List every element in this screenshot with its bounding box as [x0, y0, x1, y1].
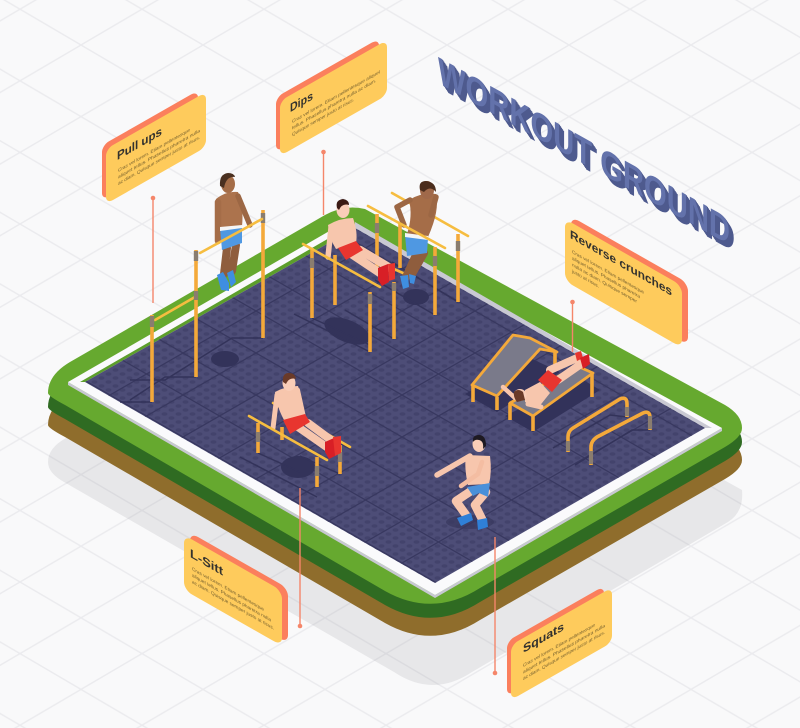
L-sit bars	[258, 403, 350, 474]
low parallel bars	[568, 398, 650, 465]
figure: L-sit	[273, 373, 341, 459]
dark grass layer	[48, 221, 742, 618]
dip bars, red shorts	[312, 243, 403, 339]
body text: pull ups: ac diam. Quisque semper justo at risus.	[118, 135, 200, 187]
front dip bar	[303, 244, 394, 352]
title	[438, 49, 735, 260]
body text: dips: tellus. Phasellus pharetra nulla ac diam.	[292, 78, 376, 132]
heading: reverse crunches: Reverse crunches	[570, 227, 672, 299]
platform shadow	[48, 300, 742, 685]
body text: reverse crunches: Cras vel lorem. Etiam pellentesque	[572, 249, 644, 296]
pull up bars	[152, 210, 263, 402]
dip bars, blue shorts	[377, 193, 468, 315]
callout: dips	[276, 34, 387, 158]
body text: reverse crunches: aliquet tellus. Phasellus pharetra	[572, 256, 640, 300]
body text: squats: aliquet tellus. Phasellus pharetra nulla	[523, 623, 605, 676]
grass top	[48, 207, 742, 604]
callout: L-sitt	[184, 529, 288, 649]
front L-sit bar	[249, 416, 327, 487]
body text: squats: ac diam. Quisque semper justo at risus.	[523, 630, 605, 682]
body text: reverse crunches: justo at risus.	[571, 268, 599, 290]
pointer: reverse crunches	[570, 300, 575, 352]
body text: pull ups: aliquet tellus. Phasellus pharetra nulla	[118, 128, 200, 181]
body text: L-sitt: ac diam. Quisque semper justo at risus.	[192, 579, 274, 632]
body text: squats: Cras vel lorem. Etiam pellentesque	[523, 622, 595, 669]
figure: pull ups	[200, 173, 262, 291]
heading: L-sitt: L-Sitt	[190, 546, 224, 579]
pointer: L-sitt	[298, 488, 302, 628]
callout: pull ups	[102, 86, 206, 206]
platform base	[48, 207, 742, 636]
figure: squats	[437, 435, 491, 530]
callout: squats	[507, 581, 612, 702]
figure: dips, red shorts	[328, 199, 395, 286]
heading: pull ups: Pull ups	[117, 123, 162, 163]
figure: dips, blue shorts	[368, 181, 445, 289]
pointer: squats	[493, 537, 497, 675]
body text: dips: Cras vel lorem. Etiam pellentesque aliquet	[292, 69, 381, 125]
workout floor	[85, 228, 705, 583]
floor border	[68, 222, 722, 598]
pointer: pull ups	[151, 196, 155, 303]
body text: pull ups: Cras vel lorem. Etiam pellentesque	[118, 127, 190, 174]
heading: squats: Squats	[523, 619, 564, 656]
body text: dips: Quisque semper justo at risus.	[292, 97, 354, 138]
body text: L-sitt: Cras vel lorem. Etiam pellentesque	[192, 566, 264, 613]
body text: reverse crunches: nulla ac diam. Quisque semper	[572, 262, 637, 305]
body text: L-sitt: aliquet tellus. Phasellus pharetra nulla	[192, 573, 271, 624]
body text: reverse crunches	[571, 249, 644, 315]
pointer: dips	[321, 150, 326, 215]
reverse crunch benches	[472, 335, 593, 431]
floor shadows	[120, 262, 650, 529]
heading: dips: Dips	[290, 88, 313, 115]
soil layer	[48, 239, 742, 636]
callout: reverse crunches	[565, 213, 688, 351]
figure: reverse crunches	[503, 351, 590, 408]
